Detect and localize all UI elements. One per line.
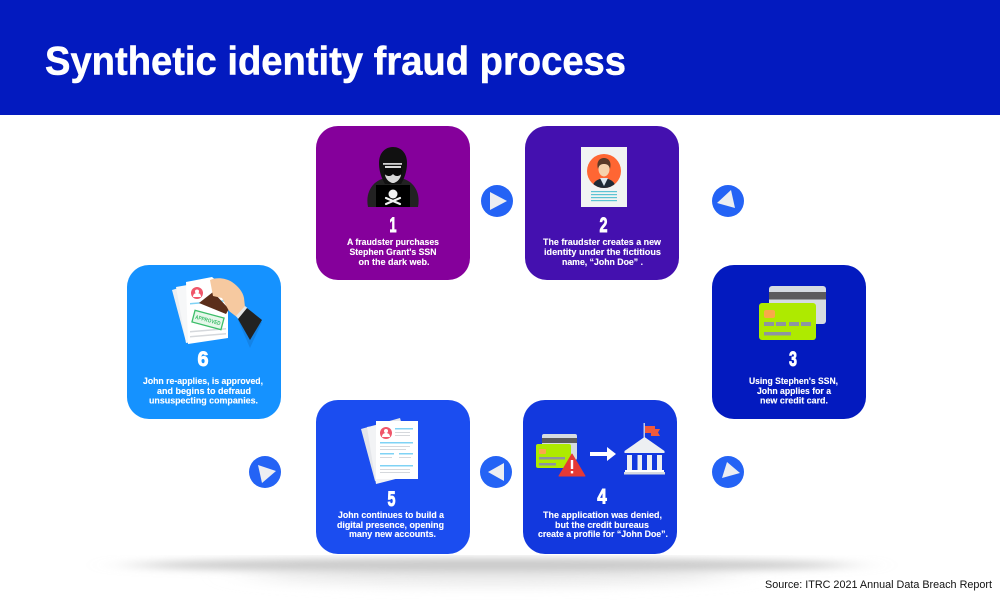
icon: arrow to bank — [590, 447, 616, 461]
step 5 description: John continues to build a — [338, 510, 445, 520]
icon: identity document — [581, 147, 627, 207]
step 1 description — [347, 237, 439, 267]
step 6 description: and begins to defraud — [157, 386, 251, 396]
arrow: step 2 to 3 — [712, 185, 744, 217]
icon: stack of documents — [361, 418, 418, 484]
approved stamp: APPROVED — [194, 315, 221, 327]
step number 1: 1 — [390, 214, 397, 237]
icon: approval stamp on documents — [172, 277, 262, 348]
step 1 description: on the dark web. — [358, 257, 430, 267]
step 4 description: create a profile for “John Doe”. — [538, 529, 668, 539]
step 1 description: A fraudster purchases — [347, 237, 439, 247]
panel: step 1 — [316, 126, 470, 280]
panel: step 2 — [525, 126, 679, 280]
step 2 description: identity under the fictitious — [544, 247, 661, 257]
step 4 description: The application was denied, — [543, 510, 662, 520]
step 6 description: John re-applies, is approved, — [143, 376, 263, 386]
step 5 description — [337, 510, 445, 539]
step 6 description — [143, 376, 263, 406]
header band — [0, 0, 1000, 115]
icon: credit cards — [759, 286, 826, 340]
step number 6: 6 — [198, 348, 208, 371]
panel: step 6 — [127, 265, 281, 419]
step number 2: 2 — [600, 214, 608, 237]
step number 5: 5 — [388, 488, 396, 511]
arrow: step 3 to 4 — [712, 456, 744, 488]
icon: denied card — [536, 434, 585, 476]
panel: step 5 — [316, 400, 470, 554]
step number 4: 4 — [597, 486, 607, 508]
step 5 description: digital presence, opening — [337, 520, 444, 530]
icon: hooded hacker — [367, 147, 419, 207]
ground shadow — [132, 558, 852, 586]
arrow: step 5 to 6 — [249, 456, 281, 488]
icon: bank building — [624, 423, 665, 474]
step 4 description — [538, 510, 668, 539]
arrow: step 4 to 5 — [480, 456, 512, 488]
step 2 description — [543, 237, 662, 267]
step 2 description: name, “John Doe” . — [562, 257, 643, 267]
arrow: step 1 to 2 — [481, 185, 513, 217]
title: Synthetic identity fraud process — [45, 40, 626, 84]
step 3 description: Using Stephen's SSN, — [749, 376, 838, 386]
step 2 description: The fraudster creates a new — [543, 237, 662, 247]
step number 3: 3 — [789, 348, 797, 371]
step 3 description: John applies for a — [757, 386, 832, 396]
step 3 description: new credit card. — [760, 396, 828, 406]
step 3 description — [749, 376, 838, 406]
panel: step 4 — [523, 400, 677, 554]
step 1 description: Stephen Grant's SSN — [350, 247, 436, 257]
panel: step 3 — [712, 265, 866, 419]
step 5 description: many new accounts. — [349, 529, 436, 539]
step 4 description: but the credit bureaus — [555, 520, 649, 530]
source note: Source: ITRC 2021 Annual Data Breach Report — [765, 579, 992, 591]
step 6 description: unsuspecting companies. — [149, 396, 258, 406]
